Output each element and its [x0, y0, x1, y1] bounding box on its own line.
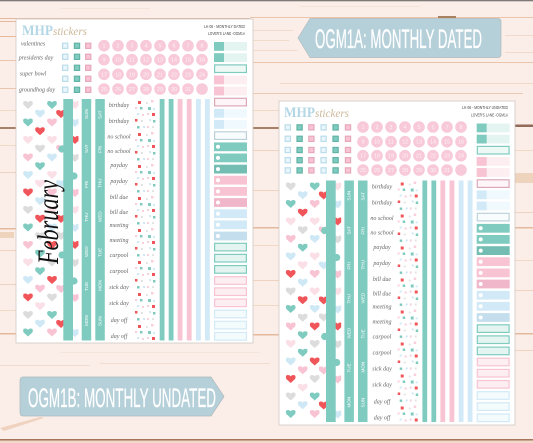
event labels: birthday — [109, 119, 129, 125]
date circles: 26 — [115, 87, 121, 93]
event labels: no school — [370, 230, 394, 236]
checkbox squares — [285, 125, 351, 173]
date circles: 2 — [375, 125, 379, 131]
date circles: 12 — [402, 140, 408, 146]
sheet title — [204, 24, 246, 36]
weekday labels: SAT — [347, 226, 352, 234]
date circles: 19 — [129, 72, 135, 78]
event labels: bill due — [110, 210, 128, 216]
weekday labels: TUE — [347, 363, 352, 372]
logo: MHP — [284, 105, 315, 121]
sticker strips and boxes — [286, 124, 510, 422]
label: OGM1B monthly undated: OGM1B: MONTHLY UNDATED — [28, 383, 216, 413]
event labels: birthday — [109, 103, 129, 109]
date circles: 8 — [459, 125, 463, 131]
date circles: 8 — [200, 44, 204, 50]
date circles: 28 — [143, 87, 149, 93]
event labels: sick day — [109, 285, 129, 291]
date circles: 24 — [458, 154, 464, 160]
weekday labels: SAT — [98, 110, 103, 119]
weekday labels: SUN — [347, 191, 352, 200]
event labels: no school — [370, 216, 394, 222]
sheet title: LH 06 - MONTHLY DATED — [204, 24, 246, 29]
weekday labels: THU — [347, 294, 352, 304]
date circles: 10 — [374, 140, 380, 146]
date circles: 25 — [360, 168, 366, 174]
logo: stickers — [315, 106, 349, 120]
event labels: no school — [107, 149, 131, 155]
date circles: 15 — [185, 58, 191, 64]
logo: MHP — [22, 23, 53, 39]
weekday labels: WED — [360, 292, 365, 304]
checkbox squares — [63, 43, 91, 92]
holiday labels: groundhog day — [19, 88, 55, 94]
weekday labels: WED — [347, 327, 352, 338]
weekday labels: MON — [84, 315, 89, 326]
date circles: 22 — [430, 154, 436, 160]
weekday labels: SAT — [84, 144, 89, 153]
date circles: 17 — [101, 72, 107, 78]
date circles: 27 — [388, 168, 394, 174]
date circles: 21 — [157, 72, 163, 78]
date circles — [98, 40, 208, 95]
date circles: 11 — [129, 58, 135, 64]
date circles: 24 — [199, 72, 205, 78]
event labels: birthday — [372, 200, 392, 206]
event labels: carpool — [373, 334, 392, 340]
date circles: 23 — [185, 72, 191, 78]
weekday labels: THU — [360, 260, 365, 270]
event labels — [370, 184, 394, 422]
weekday labels: SAT — [360, 192, 365, 200]
weekday labels: WED — [98, 211, 103, 222]
date circles: 6 — [172, 44, 176, 50]
date circles: 23 — [444, 154, 450, 160]
date circles: 5 — [158, 44, 162, 50]
date circles: 10 — [115, 58, 121, 64]
date circles: 26 — [374, 168, 380, 174]
weekday labels: FRI — [347, 262, 352, 270]
event labels: bill due — [373, 277, 391, 283]
label: OGM1A monthly dated — [298, 18, 501, 58]
event labels: birthday — [372, 184, 392, 190]
event labels: bill due — [373, 292, 391, 298]
label: OGM1B monthly undated — [20, 377, 224, 416]
weekday labels: SUN — [98, 316, 103, 326]
event labels: sick day — [372, 382, 392, 388]
sheet title: LOVER'S LANE -OGM1A — [208, 31, 246, 36]
weekday labels: THU — [84, 213, 89, 222]
date circles: 27 — [129, 87, 135, 93]
date circles: 19 — [388, 154, 394, 160]
event labels: day off — [374, 398, 392, 406]
weekday labels: SUN — [360, 398, 365, 408]
date circles: 22 — [171, 72, 177, 78]
event labels: no school — [107, 134, 131, 140]
holiday labels: super bowl — [20, 72, 47, 78]
date circles: 14 — [430, 140, 436, 146]
date circles: 18 — [374, 154, 380, 160]
weekday labels: MON — [360, 362, 365, 372]
weekday labels: THU — [98, 179, 103, 188]
holiday labels: presidents day — [18, 56, 54, 62]
date circles: 17 — [360, 154, 366, 160]
event labels: day off — [374, 414, 392, 422]
date circles: 4 — [144, 44, 148, 50]
weekday labels: TUE — [84, 282, 89, 291]
weekday labels: FRI — [98, 146, 103, 153]
date circles: 20 — [402, 154, 408, 160]
weekday labels: TUE — [360, 329, 365, 338]
date circles: 3 — [389, 125, 393, 131]
weekday labels: SUN — [84, 109, 89, 119]
event labels: meeting — [372, 304, 392, 310]
weekday labels: WED — [84, 246, 89, 257]
event labels: sick day — [372, 366, 392, 372]
logo — [284, 105, 349, 121]
weekday labels — [347, 191, 365, 408]
holiday labels: valentines — [21, 42, 46, 48]
panel: dated sticker sheet — [16, 19, 253, 343]
date circles — [357, 121, 467, 176]
date circles: 31 — [185, 87, 191, 93]
date circles: 13 — [157, 58, 163, 64]
event labels: payday — [372, 245, 391, 251]
event labels — [107, 103, 131, 340]
sheet title — [462, 105, 509, 118]
date circles: 6 — [431, 125, 435, 131]
weekday labels: MON — [98, 280, 103, 291]
date circles: 18 — [115, 72, 121, 78]
date circles: 4 — [403, 125, 407, 131]
sheet title: LH 06 - MONTHLY UNDATED — [462, 105, 509, 110]
date circles: 16 — [458, 140, 464, 146]
event labels: payday — [109, 163, 128, 169]
date circles: 29 — [157, 87, 163, 93]
date circles: 31 — [444, 168, 450, 174]
date circles: 15 — [444, 140, 450, 146]
date circles: 29 — [416, 168, 422, 174]
date circles: 7 — [445, 125, 449, 131]
date circles: 9 — [361, 140, 365, 146]
sheet title: LOVER'S LANE -OGM1A — [471, 112, 509, 118]
logo: stickers — [53, 24, 87, 38]
event labels: payday — [109, 179, 128, 185]
event labels: sick day — [109, 301, 129, 307]
date circles: 30 — [171, 87, 177, 93]
date circles: 7 — [186, 44, 190, 50]
date circles: 13 — [416, 140, 422, 146]
event labels: carpool — [373, 350, 392, 356]
event labels: carpool — [110, 269, 129, 275]
date circles: 1 — [102, 44, 106, 50]
event labels: bill due — [110, 195, 128, 201]
weekday labels — [84, 109, 103, 326]
date circles: 28 — [402, 168, 408, 174]
event labels: meeting — [372, 320, 392, 326]
holiday labels — [18, 42, 55, 94]
weekday labels: TUE — [98, 248, 103, 257]
panel: undated sticker sheet — [279, 101, 515, 425]
date circles: 30 — [430, 168, 436, 174]
date circles: 20 — [143, 72, 149, 78]
date circles: 3 — [130, 44, 134, 50]
date circles: 1 — [361, 125, 365, 131]
date circles: 16 — [199, 58, 205, 64]
date circles: 2 — [116, 44, 120, 50]
date circles: 21 — [416, 154, 422, 160]
event labels: carpool — [110, 253, 129, 259]
date circles: 12 — [143, 58, 149, 64]
sticker strips and boxes — [23, 42, 247, 341]
date circles: 11 — [388, 140, 394, 146]
February script: February — [32, 179, 65, 265]
date circles: 25 — [101, 87, 107, 93]
date circles: 9 — [102, 58, 106, 64]
event labels: day off — [111, 333, 129, 340]
weekday labels: FRI — [360, 227, 365, 234]
logo — [22, 23, 87, 39]
event labels: day off — [111, 317, 129, 324]
event labels: meeting — [110, 223, 128, 229]
date circles: 14 — [171, 58, 177, 64]
date circles: 5 — [417, 125, 421, 131]
event labels: meeting — [110, 238, 128, 244]
event labels: payday — [372, 261, 391, 267]
weekday labels: FRI — [84, 181, 89, 188]
weekday labels: MON — [347, 397, 352, 408]
